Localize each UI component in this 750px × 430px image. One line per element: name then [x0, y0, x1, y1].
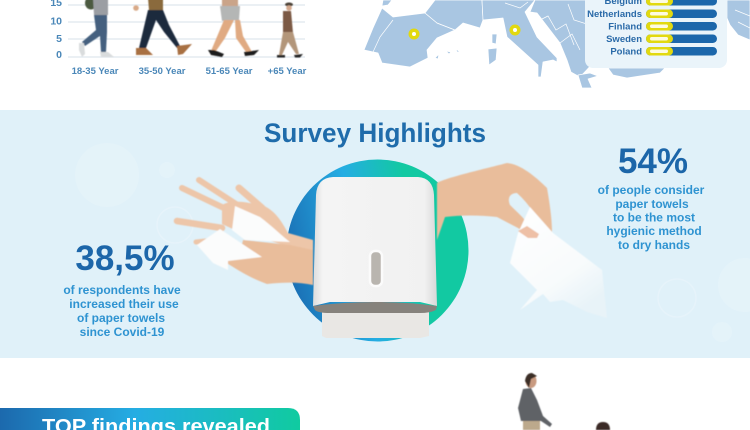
age group chart: +65 Year [268, 66, 307, 77]
figure: older adult walking [208, 0, 259, 57]
age group chart [50, 0, 307, 77]
stat: 54%: of people consider [598, 183, 705, 197]
stat: 38,5%: of respondents have [63, 283, 181, 297]
left hands with tissue [177, 180, 313, 285]
marker: Italy [510, 24, 520, 36]
country legend panel: Finland [608, 22, 642, 32]
age group chart: 51-65 Year [206, 66, 253, 77]
stat: 38,5%: of paper towels [77, 311, 165, 325]
country legend panel [585, 0, 727, 68]
map of europe [364, 0, 750, 88]
banner: top findings [0, 408, 300, 430]
panel: survey highlights [0, 110, 750, 358]
tissue [510, 207, 607, 318]
right hand holding tissue [437, 163, 607, 318]
age group chart: 18-35 Year [72, 66, 119, 77]
age group chart: 5 [56, 33, 62, 45]
stat: 38,5%: 38,5% [75, 239, 175, 278]
stat: 54%: to dry hands [618, 238, 690, 252]
stat: 38,5%: increased their use [69, 297, 179, 311]
stat: 54%: to be the most [613, 210, 695, 224]
country legend panel: Netherlands [587, 9, 642, 20]
gradient circle [286, 160, 468, 342]
country legend panel: Sweden [606, 34, 642, 45]
marker: Spain [408, 28, 420, 40]
stat: 54%: 54% [618, 142, 688, 181]
paper towel [322, 310, 429, 338]
age group chart: 0 [56, 49, 62, 61]
stat: 38,5%: since Covid-19 [80, 325, 165, 339]
country legend panel: Poland [610, 46, 642, 58]
figure: adult walking [133, 0, 192, 55]
tissue in hand [197, 206, 290, 270]
figure: senior walking [277, 2, 303, 58]
stat: 38,5% [63, 239, 181, 339]
figure: man standing [518, 373, 552, 430]
paper towel dispenser [313, 177, 437, 338]
stat: 54% [598, 142, 705, 252]
stat: 54%: paper towels [615, 197, 689, 211]
age group chart: 35-50 Year [139, 66, 186, 77]
age group chart: 10 [50, 16, 62, 28]
stat: 54%: hygienic method [606, 224, 702, 238]
figure: young adult walking [79, 0, 114, 57]
heading: Survey Highlights [264, 118, 486, 148]
figure: woman head [596, 422, 610, 430]
